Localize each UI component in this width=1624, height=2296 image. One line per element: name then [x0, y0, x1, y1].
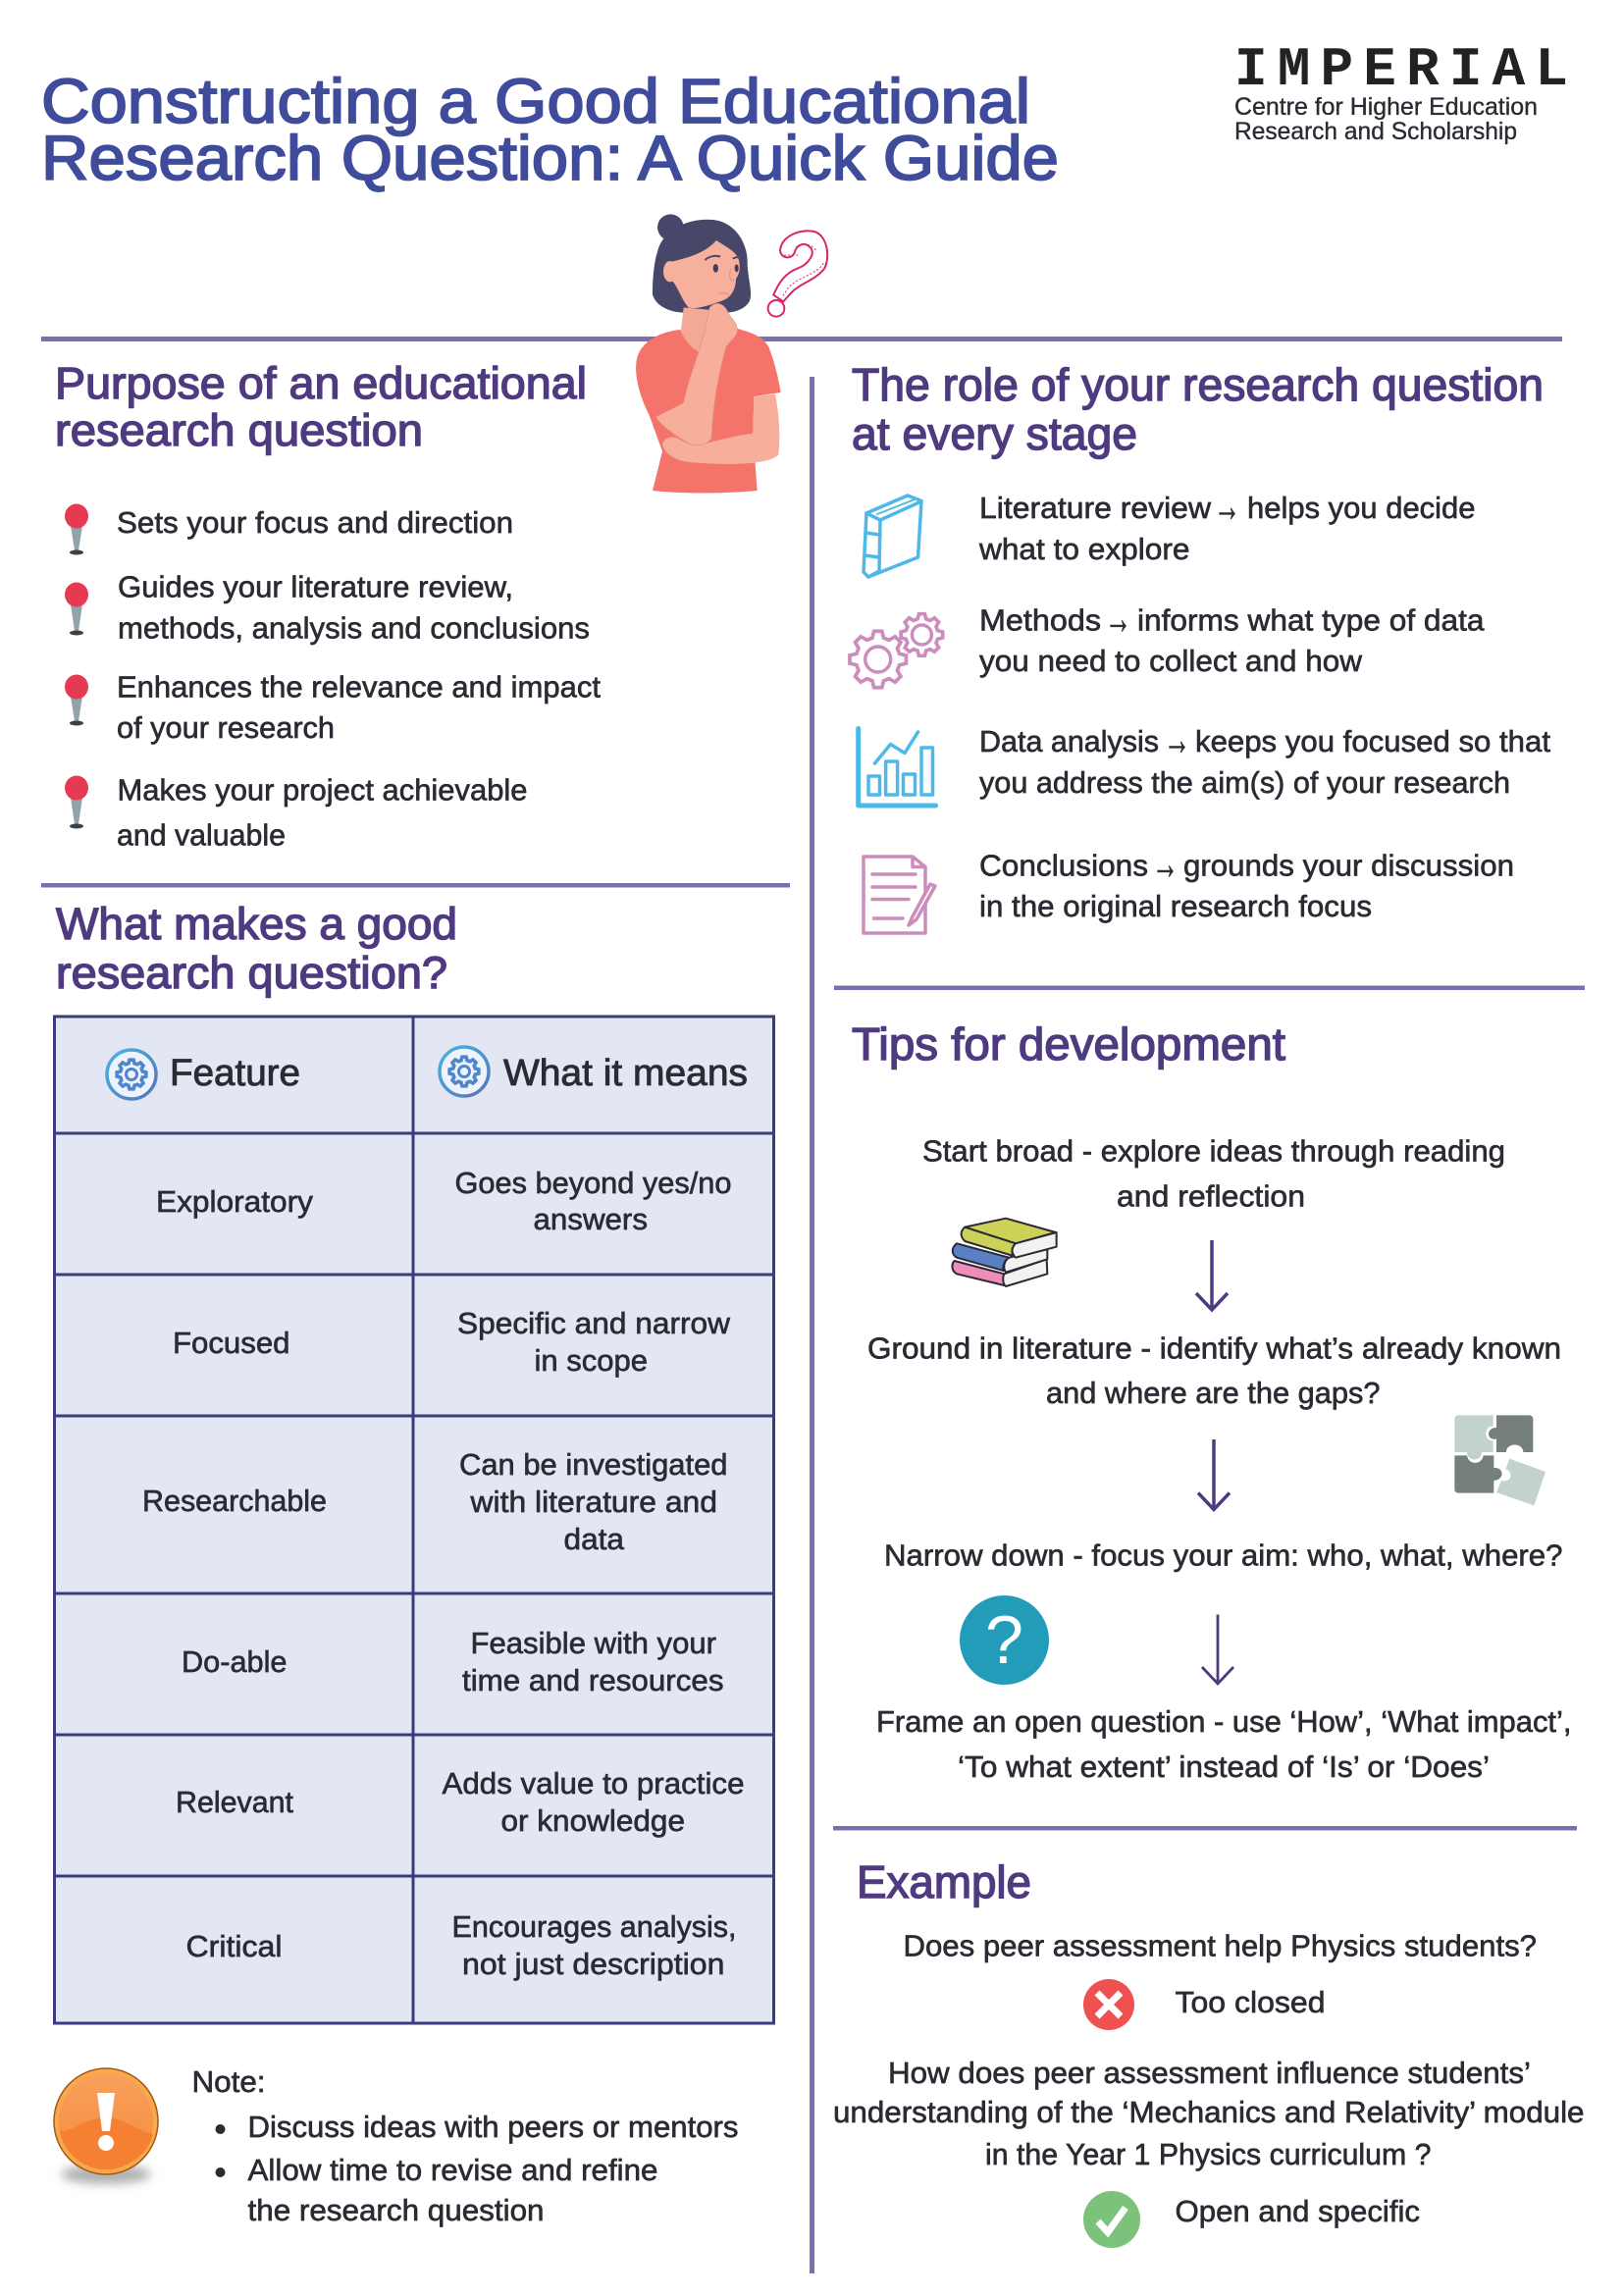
row: Exploratory: answers	[534, 1202, 648, 1236]
logo: Imperial Centre for Higher Education Research and Scholarship: IMPERIAL	[1234, 38, 1568, 101]
example: open question: in the Year 1 Physics curriculum ?	[985, 2137, 1431, 2171]
row: Researchable: with literature and	[469, 1485, 717, 1519]
icon: puzzle	[1454, 1415, 1545, 1505]
icon: document and pen	[864, 857, 935, 933]
heading: what makes a good research question: research question?	[56, 948, 447, 998]
item 2: Guides your literature review,	[118, 569, 513, 604]
note: Allow time to revise and refine	[247, 2153, 657, 2187]
tip 2: ground in literature	[867, 1331, 1561, 1410]
heading: tips: Tips for development	[852, 1018, 1285, 1070]
table: features	[55, 1017, 773, 2023]
row: Critical: not just description	[462, 1947, 724, 1981]
logo: Imperial Centre for Higher Education Research and Scholarship	[1234, 38, 1568, 145]
row: Researchable: Researchable	[142, 1484, 327, 1518]
heading: role of research question: at every stage	[852, 408, 1137, 459]
text: data analysis: →	[1164, 713, 1190, 764]
text: methods: informs what type of data	[1137, 602, 1485, 638]
logo: Imperial Centre for Higher Education Research and Scholarship: Research and Scholarship	[1234, 118, 1517, 145]
text: conclusions: grounds your discussion	[1183, 848, 1514, 883]
icon: question circle	[960, 1595, 1049, 1685]
row: Do-able: time and resources	[462, 1663, 724, 1697]
icon: bar chart	[859, 728, 936, 806]
text: methods: →	[1105, 593, 1131, 644]
pin 4	[65, 775, 88, 828]
text: data analysis: keeps you focused so that	[1195, 724, 1550, 758]
item 2	[118, 569, 590, 646]
logo: Imperial Centre for Higher Education Research and Scholarship: Centre for Higher Education	[1234, 93, 1538, 121]
column divider	[810, 377, 814, 2273]
face	[672, 240, 740, 308]
text: data analysis: you address the aim(s) of your research	[979, 765, 1510, 800]
item 3: Enhances the relevance and impact	[117, 669, 601, 704]
note	[192, 2064, 738, 2227]
icon: book	[864, 496, 921, 577]
heading: purpose: Purpose of an educational	[55, 358, 587, 408]
header: Feature: Feature	[170, 1053, 300, 1094]
header: Feature	[107, 1050, 300, 1099]
header: What it means	[440, 1047, 748, 1096]
example: open question	[833, 2056, 1584, 2171]
icon: warning	[54, 2068, 158, 2184]
text: data analysis	[979, 713, 1550, 800]
row: Do-able	[182, 1626, 724, 1697]
example: open question: How does peer assessment influence students’	[888, 2056, 1531, 2090]
tip 4: frame an open question: ‘To what extent’ instead of ‘Is’ or ‘Does’	[958, 1749, 1490, 1784]
pin 1	[65, 504, 88, 555]
heading: example: Example	[857, 1856, 1031, 1907]
tip 2: ground in literature: and where are the gaps?	[1046, 1376, 1380, 1410]
heading: what makes a good research question	[56, 899, 457, 998]
text: literature review: what to explore	[978, 532, 1189, 566]
label: open and specific: Open and specific	[1176, 2194, 1420, 2228]
row: Do-able: Do-able	[182, 1644, 287, 1679]
row: Relevant: Relevant	[176, 1785, 293, 1819]
row: Researchable: Can be investigated	[459, 1447, 728, 1482]
tip 3: narrow down: Narrow down - focus your aim: who, what, where?	[884, 1539, 1562, 1572]
tip 4: frame an open question: Frame an open question - use ‘How’, ‘What impact’,	[876, 1704, 1572, 1739]
text: conclusions: Conclusions	[979, 848, 1148, 883]
tip 1: start broad: and reflection	[1117, 1179, 1305, 1213]
title	[41, 66, 1059, 193]
illustration: thinking woman with question mark	[636, 214, 827, 493]
text: methods: you need to collect and how	[979, 644, 1363, 678]
divider	[41, 883, 790, 887]
item 4: Makes your project achievable	[118, 773, 528, 807]
arrow 2	[1198, 1439, 1230, 1509]
row: Critical	[186, 1909, 736, 1981]
icon: stack of books	[952, 1219, 1057, 1286]
title: Research Question: A Quick Guide	[41, 123, 1059, 193]
row: Researchable: data	[563, 1522, 625, 1556]
question mark	[768, 231, 827, 317]
shirt	[636, 329, 781, 493]
row: Do-able: Feasible with your	[471, 1626, 716, 1660]
text: conclusions	[979, 838, 1514, 923]
divider	[834, 985, 1585, 990]
example: closed question: Does peer assessment help Physics students?	[903, 1929, 1537, 1962]
note: Note:	[192, 2064, 265, 2099]
pin 3	[65, 675, 88, 726]
purpose list	[65, 504, 601, 852]
item 3: of your research	[117, 710, 335, 745]
row: Exploratory: Exploratory	[156, 1184, 313, 1219]
note: the research question	[247, 2193, 544, 2227]
row: Focused	[173, 1306, 731, 1378]
icon: check	[1083, 2191, 1140, 2248]
heading: what makes a good research question: What makes a good	[56, 899, 457, 949]
heading: purpose: research question	[55, 405, 423, 455]
header: What it means: What it means	[503, 1053, 748, 1094]
title: Constructing a Good Educational	[41, 66, 1030, 136]
row: Relevant: Adds value to practice	[442, 1766, 744, 1800]
icon: gears	[850, 614, 943, 688]
text: data analysis: Data analysis	[979, 724, 1159, 758]
arrow 3	[1202, 1615, 1233, 1684]
text: literature review	[978, 480, 1476, 566]
row: Exploratory: Goes beyond yes/no	[455, 1166, 732, 1200]
item 1: Sets your focus and direction	[117, 505, 513, 540]
row: Exploratory	[156, 1166, 732, 1236]
row: Focused: in scope	[534, 1343, 648, 1378]
divider	[833, 1826, 1577, 1831]
arrow 1	[1196, 1240, 1228, 1310]
item 2: methods, analysis and conclusions	[118, 610, 590, 646]
row: Focused: Focused	[173, 1326, 290, 1360]
item 3	[117, 669, 601, 745]
table background	[55, 1017, 773, 2023]
heading: role of research question	[852, 359, 1544, 459]
example: open question: understanding of the ‘Mechanics and Relativity’ module	[833, 2095, 1584, 2129]
tip 2: ground in literature: Ground in literature - identify what’s already known	[867, 1331, 1561, 1366]
hair	[653, 214, 751, 313]
text: literature review: Literature review	[979, 491, 1212, 525]
icon: cross	[1083, 1979, 1134, 2030]
top divider	[41, 337, 1562, 341]
icon: question circle: ?	[985, 1601, 1023, 1678]
note: Discuss ideas with peers or mentors	[247, 2110, 738, 2144]
table grid	[55, 1017, 773, 2023]
heading: purpose	[55, 358, 587, 455]
heading: role of research question: The role of your research question	[852, 359, 1544, 410]
row: Critical: Critical	[186, 1929, 283, 1963]
arms	[662, 394, 779, 464]
text: conclusions: in the original research focus	[979, 889, 1372, 923]
row: Relevant	[176, 1766, 744, 1838]
pin 2	[65, 583, 88, 636]
neck	[681, 307, 719, 351]
item 4	[117, 773, 528, 852]
text: conclusions: →	[1152, 838, 1179, 889]
row: Critical: Encourages analysis,	[451, 1909, 736, 1944]
item 4: and valuable	[117, 818, 286, 852]
tip 1: start broad: Start broad - explore ideas through reading	[922, 1134, 1505, 1168]
row: Relevant: or knowledge	[500, 1803, 685, 1838]
tip 1: start broad	[922, 1134, 1505, 1213]
text: literature review: helps you decide	[1247, 491, 1476, 525]
text: literature review: →	[1214, 480, 1240, 531]
label: too closed: Too closed	[1176, 1985, 1325, 2019]
text: methods: Methods	[979, 602, 1101, 638]
row: Researchable	[142, 1447, 728, 1556]
tip 4: frame an open question	[876, 1704, 1572, 1784]
text: methods	[979, 593, 1485, 678]
row: Focused: Specific and narrow	[457, 1306, 731, 1340]
